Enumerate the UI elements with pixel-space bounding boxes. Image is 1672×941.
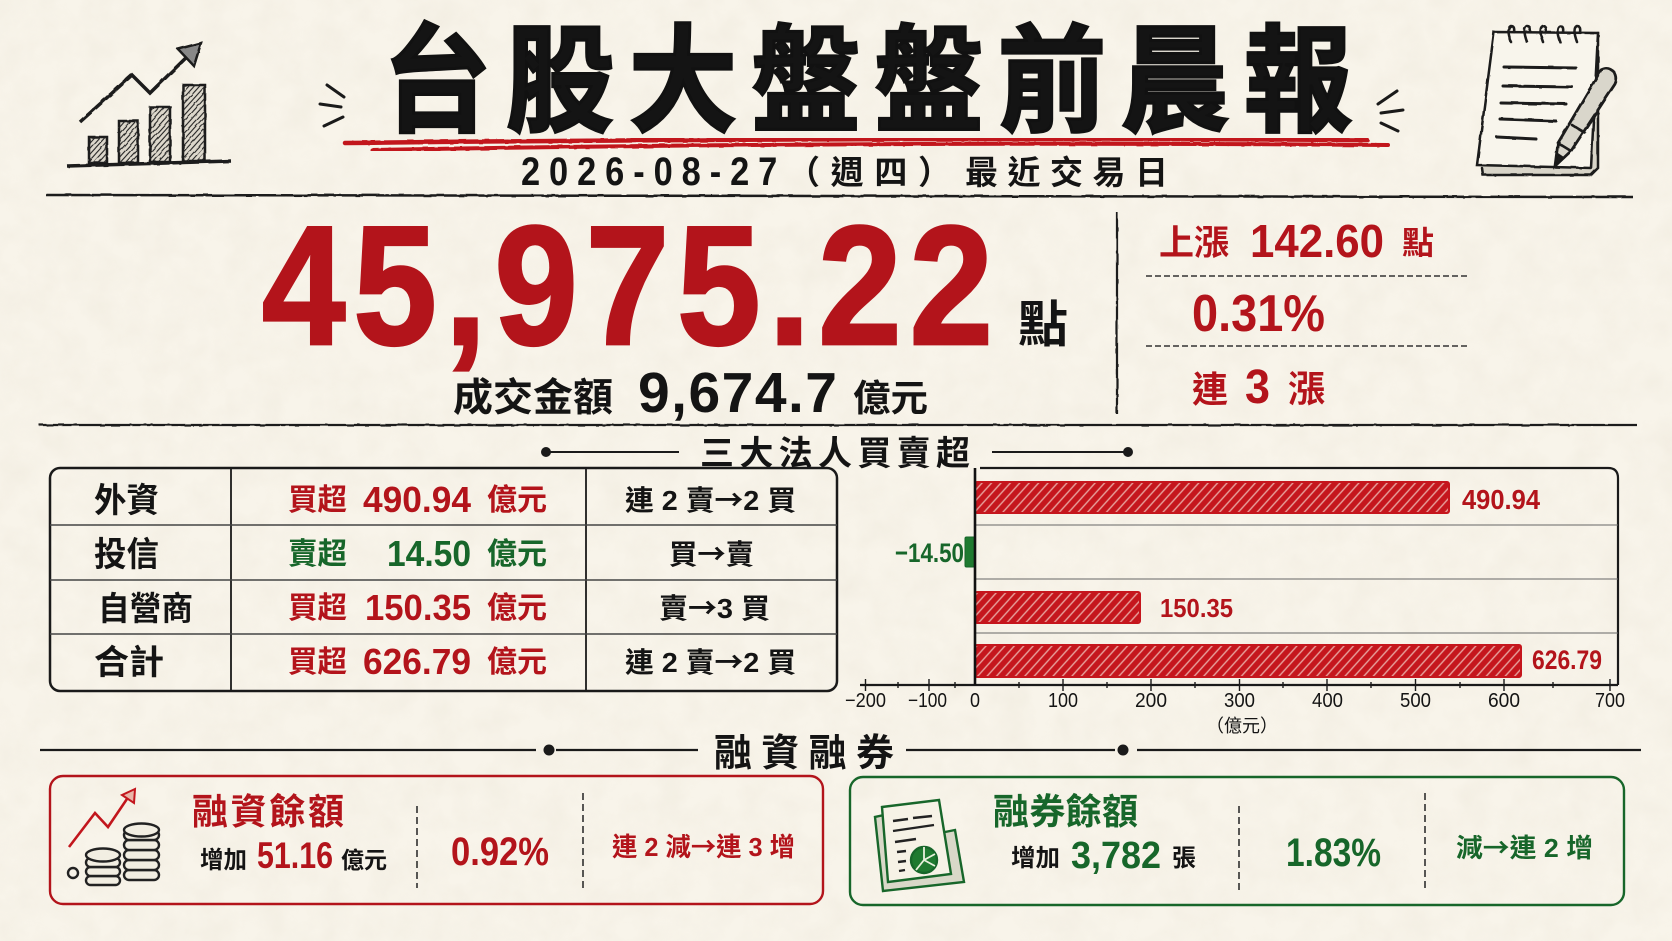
bar: investment trusts [965, 537, 975, 567]
date subtitle: 最近交易日 [965, 154, 1168, 191]
row: investment trusts: 億元 [487, 538, 547, 571]
heading: margin trading: 融資融券 [714, 733, 894, 775]
icon: left title sparks [320, 85, 344, 126]
heading: margin trading [40, 733, 1641, 775]
margin change: 51.16 [257, 835, 333, 876]
margin change: 增加 [200, 847, 247, 874]
icon: coins with rising arrow [68, 789, 159, 885]
row: dealers: 150.35 [365, 587, 471, 628]
turnover: 9,674.7 [638, 361, 837, 425]
axis tick labels: −100 [908, 690, 947, 712]
row: dealers [98, 587, 770, 628]
row: total: 億元 [487, 646, 547, 679]
row: total: 買超 [288, 646, 347, 679]
bar label: dealers: 150.35 [1160, 593, 1233, 623]
bar: total [975, 645, 1521, 677]
bar label: total: 626.79 [1532, 645, 1602, 675]
turnover: 成交金額 [453, 377, 613, 420]
title underline stroke [345, 139, 1388, 150]
row: investment trusts: 14.50 [387, 533, 471, 574]
row: foreign investors: 外資 [94, 482, 159, 520]
date subtitle [521, 149, 1168, 194]
index unit: 點 [1018, 297, 1068, 353]
row: investment trusts: 投信 [94, 536, 159, 574]
heading: institutional investors: 三大法人買賣超 [700, 435, 970, 473]
icon: document with pie chart [875, 800, 964, 891]
row: dealers: 自營商 [98, 590, 193, 627]
row: dealers: 買超 [288, 592, 347, 625]
icon: right title sparks [1378, 91, 1403, 131]
row: dealers: 億元 [487, 592, 547, 625]
turnover: 億元 [853, 378, 928, 419]
short change [1011, 835, 1196, 877]
stat: streak [1192, 361, 1325, 414]
stat: points up: 142.60 [1250, 215, 1384, 267]
row: investment trusts [94, 533, 754, 574]
icon: notebook and pen [1477, 26, 1616, 175]
margin percent: 0.92% [451, 830, 549, 874]
row: dealers: 賣→3 買 [659, 587, 770, 627]
turnover [453, 361, 928, 425]
change stats [1146, 215, 1468, 414]
stat: points up: 上漲 [1159, 224, 1229, 263]
row: foreign investors [94, 479, 796, 520]
row: foreign investors: 買超 [288, 484, 347, 517]
short change: 增加 [1011, 845, 1060, 872]
bar chart: institutional net buy/sell [845, 468, 1625, 736]
date subtitle: 2026-08-27 [521, 149, 777, 194]
margin label: 融資餘額 [192, 791, 344, 832]
short change: 張 [1172, 845, 1196, 872]
stat: percent: 0.31% [1192, 285, 1325, 343]
row: foreign investors: 億元 [487, 484, 547, 517]
index value: 45,975.22 [262, 190, 993, 380]
title: 台股大盤盤前晨報 [383, 16, 1352, 147]
row: investment trusts: 賣超 [288, 538, 347, 571]
row: foreign investors: 連 2 賣→2 買 [625, 479, 796, 519]
row: foreign investors: 490.94 [363, 479, 471, 520]
bar: dealers [975, 592, 1140, 623]
short streak: 減→連 2 增 [1456, 828, 1593, 865]
row: total: 626.79 [363, 641, 471, 682]
axis tick labels: −200 [845, 690, 886, 712]
panel: institutional table [50, 468, 837, 691]
stat: streak: 漲 [1288, 369, 1325, 410]
axis tick labels: 700 [1595, 690, 1625, 712]
bar label: investment trusts: −14.50 [895, 538, 964, 568]
stat: points up [1159, 215, 1434, 267]
axis tick labels: 600 [1488, 690, 1520, 712]
panel: margin balance [50, 776, 823, 904]
margin change: 億元 [341, 847, 387, 873]
row: investment trusts: 買→賣 [669, 533, 754, 573]
icon: rising bar chart [67, 43, 231, 166]
margin change [200, 835, 387, 876]
stat: streak: 連 [1192, 369, 1228, 410]
row: total: 合計 [94, 644, 164, 682]
panel: short balance [850, 777, 1624, 905]
axis tick labels [845, 690, 1625, 712]
short label: 融券餘額 [993, 791, 1138, 832]
axis tick labels: 0 [970, 690, 980, 712]
bar label: foreign investors: 490.94 [1462, 484, 1540, 515]
stat: points up: 點 [1402, 225, 1434, 261]
axis tick labels: 500 [1400, 690, 1431, 712]
heading: institutional investors [541, 435, 1133, 473]
margin streak: 連 2 減→連 3 增 [612, 827, 795, 864]
bar: foreign investors [975, 482, 1449, 513]
short percent: 1.83% [1286, 831, 1381, 875]
axis tick labels: 100 [1048, 690, 1078, 712]
axis unit: （億元） [1206, 716, 1278, 736]
axis tick labels: 300 [1224, 690, 1255, 712]
row: total: 連 2 賣→2 買 [625, 641, 796, 681]
date subtitle: （週四） [787, 154, 951, 191]
axis tick labels: 200 [1135, 690, 1167, 712]
short change: 3,782 [1071, 835, 1161, 877]
axis tick labels: 400 [1312, 690, 1343, 712]
row: total [94, 641, 796, 682]
stat: streak: 3 [1245, 361, 1270, 414]
